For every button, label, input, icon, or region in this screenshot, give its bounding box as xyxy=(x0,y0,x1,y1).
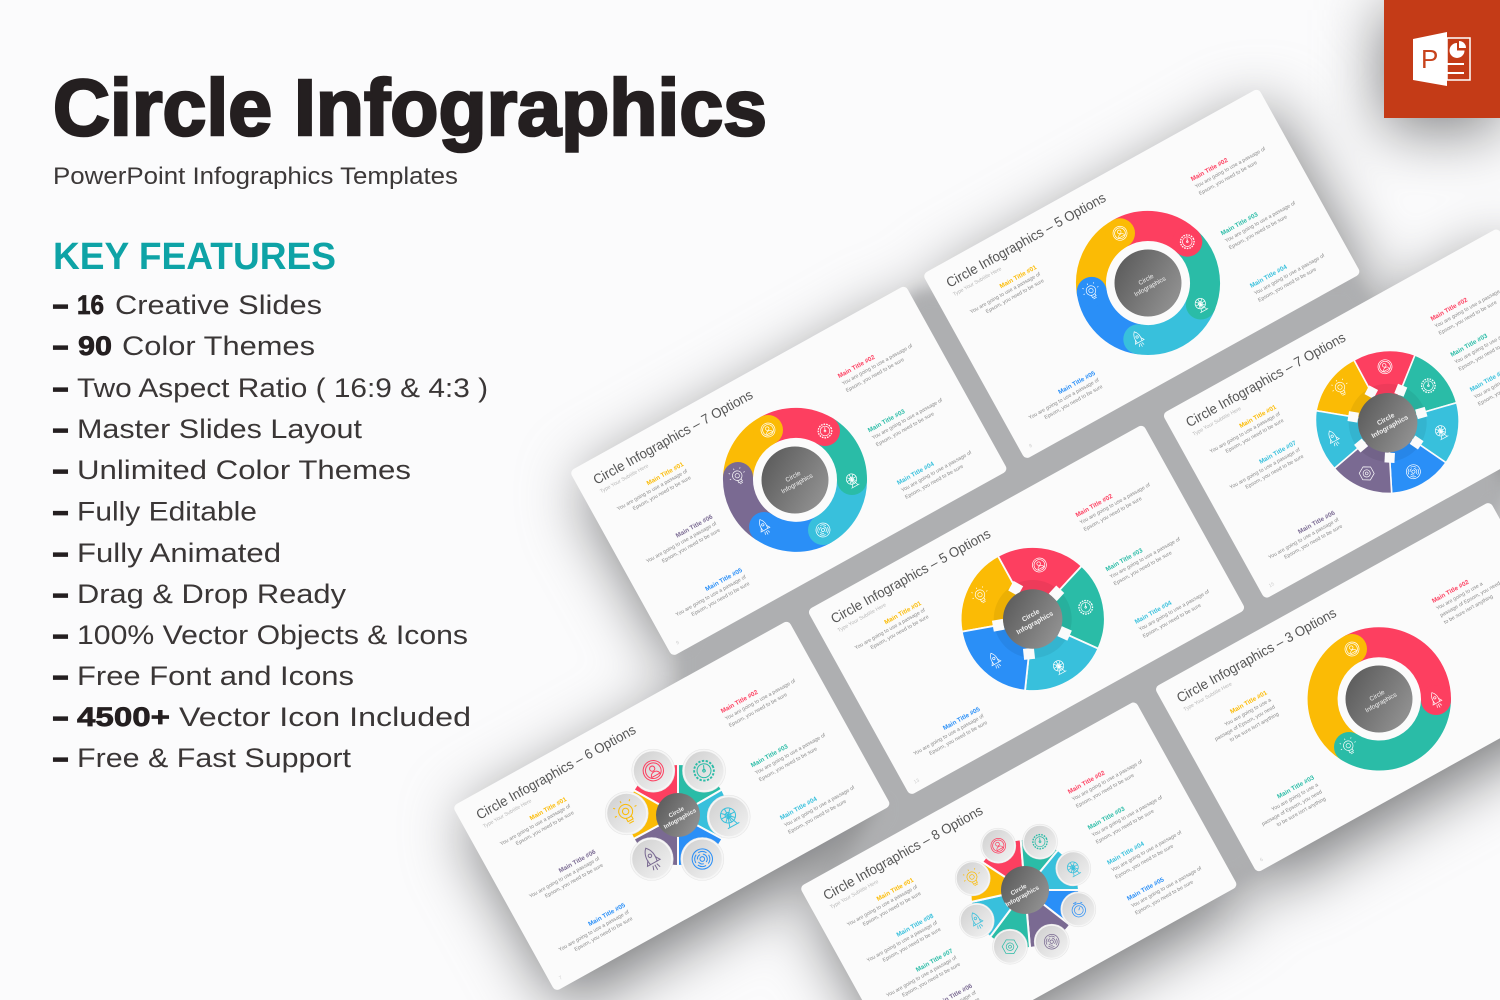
center label: Circle xyxy=(668,806,686,819)
text block: Main Title #01: You are going to use a passage of xyxy=(969,271,1042,315)
text block: Main Title #03: You are going to use a passage of xyxy=(1091,795,1164,839)
text block: Main Title #01: You are going to use a passage of xyxy=(846,884,919,928)
icon letter P: P xyxy=(1421,44,1438,74)
feature: free font: – xyxy=(53,660,68,691)
petal diagram xyxy=(955,824,1096,964)
center label xyxy=(660,801,698,831)
text block: Main Title #05: Main Title #05 xyxy=(587,902,627,928)
feature: 90 Color Themes: – xyxy=(53,330,68,361)
slide subtitle: Type Your Subtitle Here xyxy=(829,879,880,911)
text block: Main Title #05 xyxy=(671,567,751,625)
feature: unlimited color themes: Unlimited Color Themes xyxy=(77,455,411,485)
ring diagram xyxy=(723,415,867,545)
text block: Main Title #06: Epsom, you need to be sure xyxy=(544,863,604,900)
center label xyxy=(1001,878,1041,909)
feature: support: – xyxy=(53,742,68,773)
text block: Main Title #02: Epsom, you need to be sure xyxy=(728,692,788,729)
center label: Infographics xyxy=(1364,691,1398,714)
center label xyxy=(1360,684,1398,714)
text block: Main Title #02: to be sure isn't anything xyxy=(1443,594,1494,626)
heading: key features: KEY FEATURES xyxy=(53,236,336,278)
text block: Main Title #01: passage of Epsom, you need xyxy=(1214,704,1276,743)
feature: 4500+ icons: Vector Icon Included xyxy=(179,702,471,732)
feature: 16 Creative Slides: – xyxy=(53,289,68,320)
text block: Main Title #04 xyxy=(1249,245,1330,304)
petal diagram xyxy=(605,749,750,880)
text block: Main Title #04: Epsom, you need to be sure xyxy=(1142,603,1202,640)
text block: Main Title #01 xyxy=(1205,404,1285,462)
feature: aspect ratio: – xyxy=(53,372,68,403)
feature: unlimited color themes: – xyxy=(53,454,68,485)
slide: 3 options ring xyxy=(1154,501,1500,873)
text block: Main Title #01: You are going to use a xyxy=(1224,697,1272,728)
text block: Main Title #03: Main Title #03 xyxy=(1276,774,1316,800)
feature: master slides: – xyxy=(53,413,68,444)
text block: Main Title #06: You are going to use a passage of xyxy=(1268,517,1340,561)
text block: Main Title #02: Epsom, you need to be sure xyxy=(1075,773,1135,810)
text block: Main Title #01 xyxy=(612,461,693,519)
center label xyxy=(1366,407,1410,440)
PowerPoint badge xyxy=(1384,0,1500,118)
center label: Circle xyxy=(1010,883,1028,897)
text block: Main Title #04: Main Title #04 xyxy=(1134,599,1174,626)
text block: Main Title #02 xyxy=(1075,474,1156,533)
text block: Main Title #05 xyxy=(1126,858,1207,916)
text block: Main Title #08: Main Title #08 xyxy=(895,912,935,939)
feature: fully editable: Fully Editable xyxy=(77,496,257,526)
text block: Main Title #01 xyxy=(1206,689,1281,750)
feature: 4500+ icons: – xyxy=(53,701,68,732)
text block: Main Title #04 xyxy=(1134,581,1215,640)
text block: Main Title #03: Epsom, you need to be sure xyxy=(875,411,936,448)
text block: Main Title #04 xyxy=(896,442,977,501)
text block: Main Title #02 xyxy=(1431,566,1500,626)
text block: Main Title #07: Main Title #07 xyxy=(915,947,955,974)
slide title: Circle Infographics – 5 Options xyxy=(944,190,1108,290)
feature: 90 Color Themes: 90 xyxy=(78,331,112,361)
text block: Main Title #03 xyxy=(1449,314,1500,373)
text block: Main Title #02: You are going to use a passage of xyxy=(1079,482,1152,526)
text block: Main Title #03 xyxy=(1220,192,1301,251)
text block: Main Title #04 xyxy=(1469,349,1500,408)
text block: Main Title #01: Main Title #01 xyxy=(529,796,568,822)
text block: Main Title #01: You are going to use a passage of xyxy=(1209,411,1282,455)
text block: Main Title #06 xyxy=(1263,509,1344,567)
text block: Main Title #01: to be sure isn't anything xyxy=(1229,711,1280,743)
text block: Main Title #02: You are going to use a xyxy=(1435,581,1484,612)
text block: Main Title #02: Main Title #02 xyxy=(837,354,877,380)
page number: 6 xyxy=(1259,857,1265,863)
text block: Main Title #01: Main Title #01 xyxy=(883,600,923,626)
slide card xyxy=(799,701,1238,1000)
text block: Main Title #01: You are going to use a passage of xyxy=(854,607,927,651)
text block: Main Title #01: Epsom, you need to be sure xyxy=(632,475,692,512)
text block: Main Title #06: Main Title #06 xyxy=(558,848,598,875)
slide title: Circle Infographics – 7 Options xyxy=(591,387,755,487)
text block: Main Title #05: Epsom, you need to be sure xyxy=(928,720,989,757)
text block: Main Title #07: You are going to use a passage of xyxy=(885,955,958,999)
center label: Circle xyxy=(1137,273,1156,287)
slide: 5 options sectors xyxy=(807,424,1247,798)
text block: Main Title #02: You are going to use a passage of xyxy=(841,343,914,387)
center label: Infographics xyxy=(1004,884,1041,909)
text block: Main Title #02: Main Title #02 xyxy=(1075,493,1114,519)
text block: Main Title #03: Main Title #03 xyxy=(1087,805,1127,832)
text block: Main Title #01: Epsom, you need to be sure xyxy=(870,614,930,651)
text block: Main Title #05: You are going to use a passage of xyxy=(1028,377,1101,421)
text block: Main Title #03: to be sure isn't anything xyxy=(1276,796,1327,828)
slide subtitle: Type Your Subtitle Here xyxy=(952,266,1003,298)
feature: drag and drop: Drag & Drop Ready xyxy=(77,579,347,609)
feature: aspect ratio: Two Aspect Ratio ( 16:9 & 4:3 ) xyxy=(77,373,488,403)
text block: Main Title #03 xyxy=(1087,787,1168,846)
text block: Main Title #06 xyxy=(524,848,605,906)
slide: 5 options ring xyxy=(922,88,1361,460)
text block: Main Title #02 xyxy=(1430,278,1500,337)
text block: Main Title #05: Epsom, you need to be sure xyxy=(1044,384,1104,421)
text block: Main Title #05 xyxy=(908,706,989,764)
text block: Main Title #02: Main Title #02 xyxy=(1430,296,1469,323)
text block: Main Title #08: Epsom, you need to be sure xyxy=(882,927,942,964)
text block: Main Title #05 xyxy=(1024,370,1104,428)
sector diagram xyxy=(1315,350,1459,493)
slide subtitle: Type Your Subtitle Here xyxy=(1183,681,1233,713)
text block: Main Title #04 xyxy=(1106,822,1187,881)
text block: Main Title #03: You are going to use a xyxy=(1271,782,1319,813)
feature: fully animated: – xyxy=(53,537,68,568)
text block: Main Title #01: Main Title #01 xyxy=(999,264,1038,290)
text block: Main Title #02: Main Title #02 xyxy=(720,689,760,715)
text block: Main Title #05: Main Title #05 xyxy=(704,567,744,593)
text block: Main Title #03: Epsom, you need to be sure xyxy=(1228,214,1289,251)
feature: drag and drop: – xyxy=(53,578,68,609)
page number: 9 xyxy=(675,640,681,647)
text block: Main Title #08 xyxy=(862,912,943,970)
text block: Main Title #05: Epsom, you need to be sure xyxy=(574,916,634,953)
center label xyxy=(1011,603,1055,636)
text block: Main Title #04: You are going to use a passage of xyxy=(1253,253,1326,297)
feature: 16 Creative Slides: Creative Slides xyxy=(115,290,322,320)
text block: Main Title #01: Epsom, you need to be sure xyxy=(1225,418,1285,455)
text block: Main Title #03: You are going to use a passage of xyxy=(1224,200,1297,244)
text block: Main Title #01: Epsom, you need to be sure xyxy=(515,810,575,847)
text block: Main Title #03: You are going to use a passage of xyxy=(754,732,827,776)
text block: Main Title #01 xyxy=(850,600,930,658)
feature: fully animated: Fully Animated xyxy=(77,538,281,568)
text block: Main Title #04: You are going to use a passage of xyxy=(1110,830,1183,874)
center label xyxy=(776,465,814,495)
feature: master slides: Master Slides Layout xyxy=(77,414,363,444)
text block: Main Title #05: Epsom, you need to be sure xyxy=(691,581,751,618)
text block: Main Title #06: Epsom, you need to be sure xyxy=(1283,524,1344,561)
text block: Main Title #02 xyxy=(837,335,918,394)
text block: Main Title #02 xyxy=(1067,751,1148,810)
text block: Main Title #03: Main Title #03 xyxy=(1449,332,1489,359)
feature: 16 Creative Slides: 16 xyxy=(77,290,104,320)
icon: slide outline with chart xyxy=(1447,38,1470,80)
slide title: Circle Infographics – 7 Options xyxy=(1183,330,1348,430)
center label: Circle xyxy=(1021,608,1041,624)
text block: Main Title #06: Epsom, you need to be sure xyxy=(661,528,721,565)
text block: Main Title #06: Main Title #06 xyxy=(1297,509,1337,536)
slide: 8 options xyxy=(799,701,1238,1000)
text block: Main Title #07: Epsom, you need to be sure xyxy=(1245,454,1305,491)
ring diagram xyxy=(1323,634,1451,762)
text block: Main Title #03: Epsom, you need to be sure xyxy=(1113,550,1173,587)
text block: Main Title #02: passage of Epsom, you need xyxy=(1439,581,1500,619)
text block: Main Title #02: Epsom, you need to be sure xyxy=(845,357,905,394)
slide card xyxy=(807,424,1246,796)
text block: Main Title #03: Epsom, you need to be sure xyxy=(758,746,819,783)
ring diagram xyxy=(1077,218,1216,354)
text block: Main Title #03 xyxy=(1253,774,1328,834)
slide: 6 options xyxy=(452,620,891,992)
text block: Main Title #01 xyxy=(495,796,576,854)
text block: Main Title #04: Epsom, you need to be sure xyxy=(1114,843,1175,881)
text block: Main Title #01: Epsom, you need to be sure xyxy=(862,891,922,928)
text block: Main Title #03: You are going to use a passage of xyxy=(1109,536,1182,580)
center label: Infographics xyxy=(1016,610,1055,636)
slide subtitle: Type Your Subtitle Here xyxy=(1192,406,1243,438)
text block: Main Title #07: Epsom, you need to be sure xyxy=(901,962,962,999)
text block: Main Title #01 xyxy=(842,877,923,935)
slide card xyxy=(569,285,1008,657)
text block: Main Title #06: You are going to use a passage of xyxy=(528,856,601,900)
text block: Main Title #02 xyxy=(1190,138,1271,197)
page number: 7 xyxy=(558,975,564,982)
text block: Main Title #06: You are going to use a passage of xyxy=(645,521,718,565)
slide: 7 options sectors xyxy=(1162,228,1500,601)
slide card xyxy=(1162,228,1500,599)
text block: Main Title #02: You are going to use a passage of xyxy=(1194,146,1267,190)
text block: Main Title #07: Main Title #07 xyxy=(1258,439,1298,466)
text block: Main Title #03: passage of Epsom, you need xyxy=(1261,789,1323,827)
slide card xyxy=(922,88,1361,460)
slide subtitle: Type Your Subtitle Here xyxy=(482,798,533,830)
text block: Main Title #04: Main Title #04 xyxy=(779,795,819,822)
text block: Main Title #03 xyxy=(1105,528,1186,587)
text block: Main Title #05: Epsom, you need to be sure xyxy=(1134,879,1195,916)
feature: vector objects: 100% Vector Objects & Icons xyxy=(77,620,468,650)
sector diagram xyxy=(961,547,1105,691)
text block: Main Title #03: Main Title #03 xyxy=(867,408,907,434)
center label: Circle xyxy=(1368,689,1387,703)
center label: Circle xyxy=(784,470,803,484)
text block: Main Title #03 xyxy=(867,389,948,448)
shadow between slides xyxy=(680,278,1500,880)
center label: Infographics xyxy=(1371,414,1410,440)
slide subtitle: Type Your Subtitle Here xyxy=(837,602,888,634)
text block: Main Title #01: Main Title #01 xyxy=(1238,404,1278,430)
text block: Main Title #04: You are going to use a passage of xyxy=(783,785,856,829)
slide title: Circle Infographics – 5 Options xyxy=(828,526,993,626)
text block: Main Title #05: You are going to use a passage of xyxy=(675,574,748,618)
text block: Main Title #04: Main Title #04 xyxy=(1106,840,1146,867)
page number: 8 xyxy=(1028,443,1034,450)
text block: Main Title #04: You are going to use a passage of xyxy=(1138,589,1211,633)
text block: Main Title #03: You are going to use a passage of xyxy=(871,397,944,441)
text block: Main Title #07: You are going to use a passage of xyxy=(1229,447,1302,491)
text block: Main Title #06: Main Title #06 xyxy=(675,513,715,540)
text block: Main Title #02: Epsom, you need to be sure xyxy=(1438,300,1498,337)
text block: Main Title #01: Epsom, you need to be sure xyxy=(985,278,1045,315)
text block: Main Title #05: You are going to use a passage of xyxy=(1130,865,1203,909)
center label xyxy=(1129,268,1167,298)
center label: Infographics xyxy=(663,808,698,831)
text block: Main Title #02: Main Title #02 xyxy=(1190,157,1230,183)
text block: Main Title #03: Epsom, you need to be sure xyxy=(1095,808,1155,846)
subtitle: PowerPoint Infographics Templates xyxy=(53,163,458,190)
title: Circle Infographics xyxy=(53,63,767,152)
feature: vector objects: – xyxy=(53,619,68,650)
text block: Main Title #03: Main Title #03 xyxy=(1220,211,1260,237)
text block: Main Title #01: Main Title #01 xyxy=(1229,689,1269,716)
slide title: Circle Infographics – 3 Options xyxy=(1174,605,1339,706)
text block: Main Title #04: You are going to use a passage of xyxy=(900,450,973,494)
feature: fully editable: – xyxy=(53,496,68,526)
text block: Main Title #04: Main Title #04 xyxy=(896,460,936,487)
page number: 15 xyxy=(1268,581,1276,589)
text block: Main Title #05: Main Title #05 xyxy=(1126,876,1166,902)
text block: Main Title #05: Main Title #05 xyxy=(1057,370,1097,396)
slide title: Circle Infographics – 8 Options xyxy=(821,803,985,903)
slide card xyxy=(1154,501,1500,873)
text block: Main Title #01: Main Title #01 xyxy=(646,461,685,487)
text block: Main Title #03: Main Title #03 xyxy=(1105,547,1144,573)
feature: 4500+ icons: 4500+ xyxy=(77,702,170,732)
text block: Main Title #01 xyxy=(965,264,1046,322)
text block: Main Title #01: Main Title #01 xyxy=(876,877,915,903)
feature: 90 Color Themes xyxy=(53,330,315,361)
text block: Main Title #02: Epsom, you need to be sure xyxy=(1198,160,1258,197)
text block: Main Title #04: Main Title #04 xyxy=(1249,263,1289,290)
slide shadows xyxy=(462,10,1500,1000)
text block: Main Title #02: You are going to use a passage of xyxy=(724,678,797,722)
text block: Main Title #01: You are going to use a passage of xyxy=(616,468,689,512)
center label: Infographics xyxy=(780,472,814,495)
feature: 90 Color Themes: Color Themes xyxy=(122,331,315,361)
text block: Main Title #02: You are going to use a passage of xyxy=(1071,759,1144,803)
text block: Main Title #05 xyxy=(554,902,634,960)
text block: Main Title #08: You are going to use a passage of xyxy=(866,920,939,964)
center label: Circle xyxy=(1376,412,1396,427)
feature: free font: Free Font and Icons xyxy=(77,661,354,691)
text block: Main Title #04: Epsom, you need to be sure xyxy=(904,464,965,501)
text block: Main Title #07 xyxy=(1225,439,1305,497)
text block: Main Title #03: Main Title #03 xyxy=(750,743,790,769)
feature: support: Free & Fast Support xyxy=(77,743,352,773)
text block: Main Title #06 xyxy=(901,982,981,1000)
text block: Main Title #01: You are going to use a passage of xyxy=(499,803,572,847)
page number: 13 xyxy=(913,778,921,786)
text block: Main Title #03 xyxy=(750,724,831,783)
icon: door xyxy=(1413,32,1447,86)
feature list xyxy=(53,289,488,773)
text block: Main Title #04: Epsom, you need to be sure xyxy=(787,799,848,836)
slide subtitle: Type Your Subtitle Here xyxy=(599,463,650,495)
text block: Main Title #04: Epsom, you need to be sure xyxy=(1257,267,1318,304)
feature: 4500+ icons xyxy=(53,701,471,732)
text block: Main Title #02: Epsom, you need to be sure xyxy=(1083,496,1143,533)
text block: Main Title #05: Main Title #05 xyxy=(942,706,982,732)
text block: Main Title #02: Main Title #02 xyxy=(1067,769,1107,796)
center label: Infographics xyxy=(1133,275,1167,298)
slide card xyxy=(452,620,891,992)
slide title: Circle Infographics – 6 Options xyxy=(474,722,638,822)
text block: Main Title #02: Main Title #02 xyxy=(1431,579,1471,605)
slide: 7 options ring xyxy=(569,285,1008,657)
feature: 16 Creative Slides xyxy=(53,289,322,320)
text block: Main Title #05: You are going to use a passage of xyxy=(558,909,631,953)
text block: Main Title #04 xyxy=(779,777,860,836)
text block: Main Title #02 xyxy=(720,670,801,729)
text block: Main Title #06 xyxy=(641,513,722,571)
text block: Main Title #05: You are going to use a passage of xyxy=(913,713,985,757)
